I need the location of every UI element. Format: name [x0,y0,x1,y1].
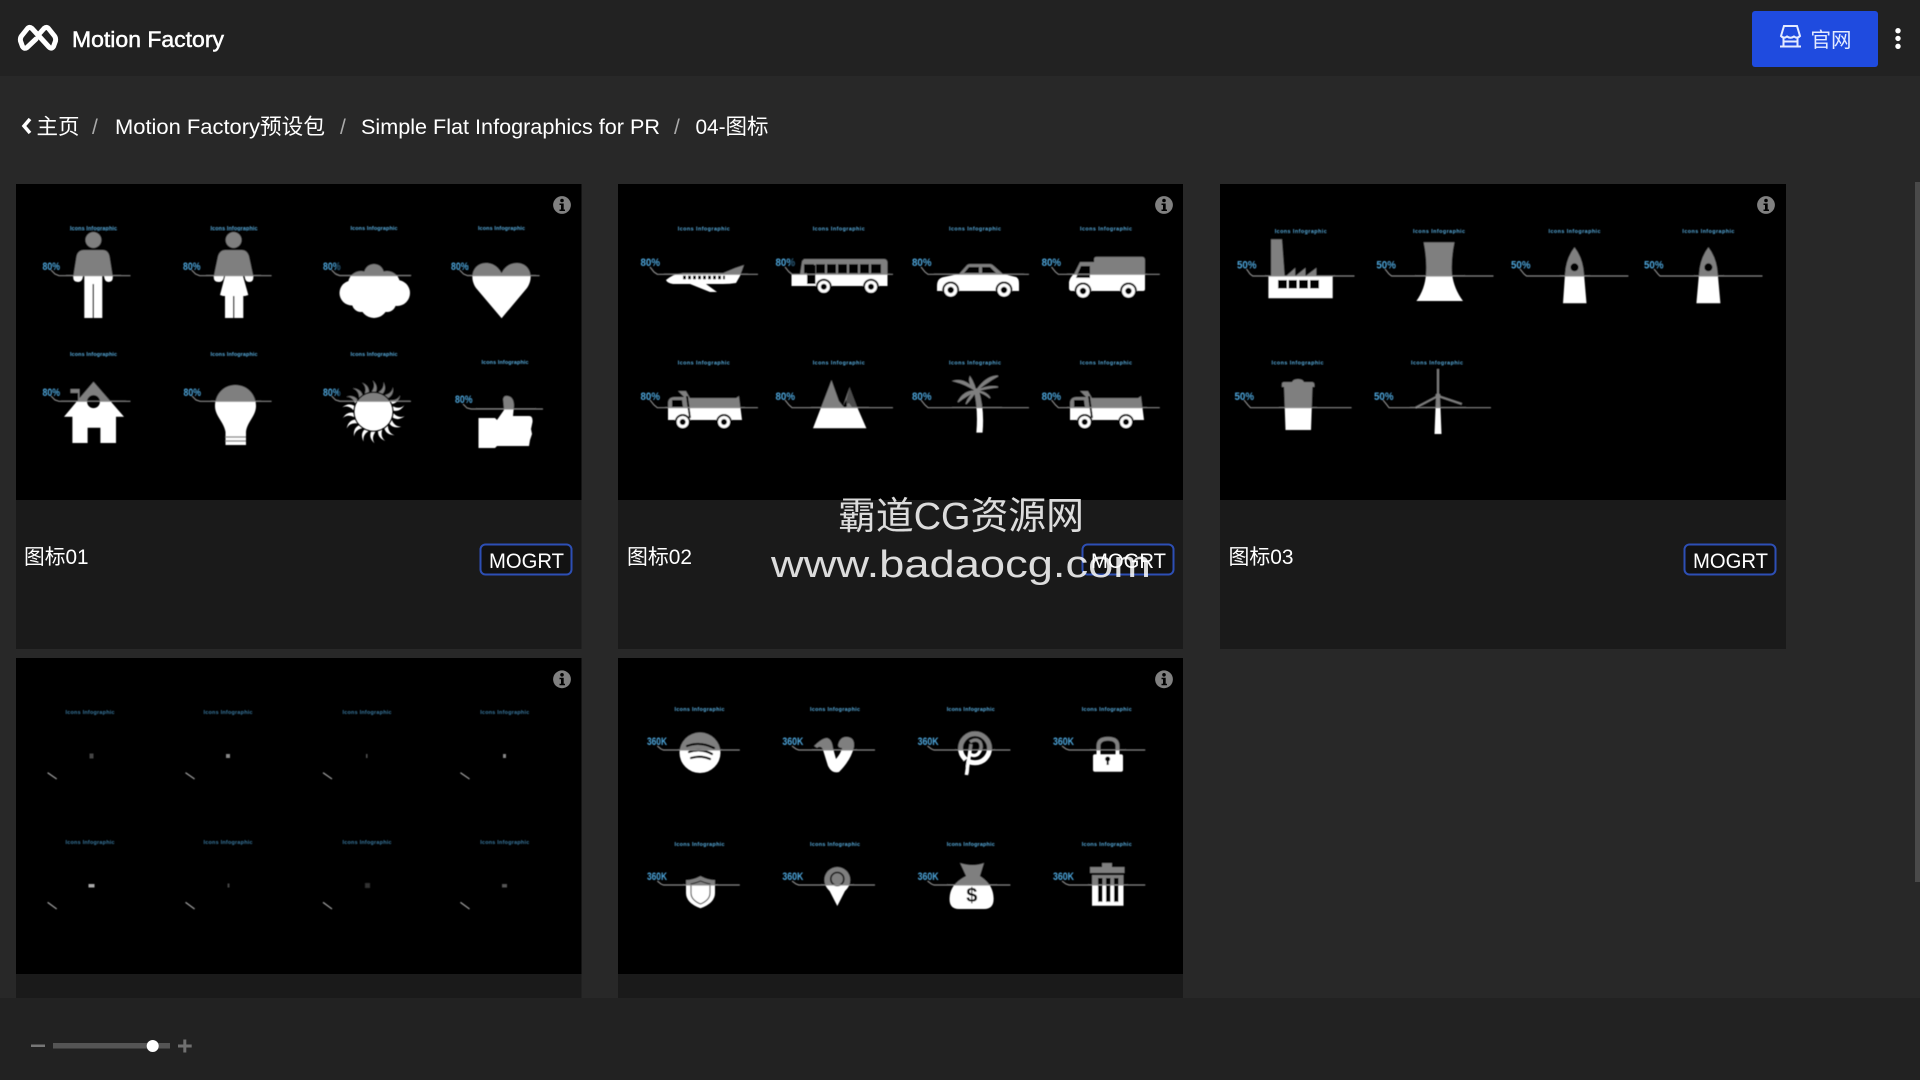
icon cell: rocket: Icons Infographic [1548,229,1600,235]
thumbnail: vehicles and landscape icons [618,184,1183,500]
icon cell: van [1042,226,1160,300]
icon cell: van: Icons Infographic [1080,226,1132,232]
card title: 图标03 [1228,546,1294,569]
icon: Motion Factory logo [20,28,56,48]
breadcrumb: Motion Factory [115,115,260,139]
row 1 of faint labels and marks: Icons Infographic [66,710,114,716]
icon cell: man [42,226,130,318]
icon cell: mountains [776,360,893,428]
icon cell: light bulb: Icons Infographic [210,352,258,358]
icon cell: man: 80% [42,261,60,273]
watermark [770,496,1151,586]
icon cell: cup [1234,360,1352,430]
thumbnail: brand and utility icons [618,658,1183,974]
icon cell: woman: Icons Infographic [210,226,258,232]
icon: storefront [1780,26,1801,46]
icon cell: cup: 50% [1234,391,1254,403]
icon cell: sun: Icons Infographic [350,352,398,358]
icon cell: cooling tower: 50% [1376,260,1396,272]
icon cell: vimeo: 360K [782,736,803,748]
icon cell: spotify: Icons Infographic [674,707,724,713]
icon cell: rocket: Icons Infographic [1682,229,1734,235]
button: MOGRT: MOGRT [489,550,564,573]
icon cell: shield [647,842,740,908]
breadcrumb: / [674,116,680,139]
icon cell: bus [776,226,893,295]
thumbnail: people and everyday icons [16,184,582,500]
icon cell: house [42,352,130,443]
icon cell: money bag: Icons Infographic [947,842,995,848]
button: MOGRT [480,544,572,574]
icon cell: rocket: 50% [1644,260,1664,272]
icon cell: trash can: 360K [1053,871,1074,883]
icon cell: pinterest: 360K [918,736,939,748]
icon: info badge [553,196,571,214]
breadcrumb: 主页 [36,115,80,139]
icon cell: palm tree: Icons Infographic [949,360,1001,366]
icon: info badge [1757,196,1775,214]
icon cell: dump truck: Icons Infographic [1080,360,1132,366]
icon cell: vimeo [782,707,875,772]
icon cell: cloud: Icons Infographic [350,226,398,232]
breadcrumb: 04- [696,115,726,139]
icon cell: bus: 80% [776,257,795,269]
row 1 of faint labels and marks [48,710,529,779]
card title: 图标01 [24,546,88,569]
row 1 of faint labels and marks: Icons Infographic [342,710,392,716]
icon cell: palm tree [912,360,1029,432]
icon cell: car: 80% [912,257,932,269]
icon cell: house: 80% [42,387,60,399]
breadcrumb: / [92,116,98,139]
row 2 of faint labels and marks: Icons Infographic [342,840,392,846]
button: MOGRT [1082,544,1174,574]
icon: zoom in plus [178,1040,192,1052]
icon cell: map pin: 360K [782,871,803,883]
button: MOGRT: MOGRT [1091,550,1166,573]
icon cell: woman [183,226,272,318]
icon cell: light bulb [184,352,272,445]
bottom zoom bar [0,998,1920,1080]
row 2 of faint labels and marks: Icons Infographic [480,840,529,846]
panel: card 图标02 [618,184,1183,649]
icon cell: airplane: 80% [640,257,660,269]
icon cell: padlock [1053,707,1145,772]
icon cell: mountains: Icons Infographic [813,360,865,366]
icon cell: heart: Icons Infographic [478,226,525,232]
icon cell: mountains: 80% [776,391,795,403]
icon cell: cup: Icons Infographic [1272,360,1324,366]
icon cell: thumbs up: 80% [455,394,473,406]
row 1 of faint labels and marks: Icons Infographic [204,710,252,716]
icon cell: rocket: 50% [1511,260,1531,272]
row 2 of faint labels and marks [48,840,529,909]
thumbnail: energy icons [1220,184,1786,500]
panel: card 图标01 [16,184,582,649]
icon cell: dump truck: 80% [640,391,660,403]
top navigation bar [0,0,1920,76]
icon cell: wind turbine [1374,360,1491,434]
icon cell: woman: 80% [183,261,201,273]
button: MOGRT [1684,544,1776,574]
card title: 图标02 [627,546,692,569]
breadcrumb: / [340,116,346,139]
brand name: Motion Factory [72,27,225,52]
icon cell: airplane: Icons Infographic [678,226,730,232]
icon cell: rocket [1644,229,1762,303]
icon: more menu dots [1895,28,1901,49]
icon cell: money bag: 360K [918,871,939,883]
icon cell: factory: 50% [1237,260,1257,272]
icon: info badge [1155,670,1173,688]
icon cell: dump truck: 80% [1042,391,1061,403]
breadcrumb: 图标 [726,115,768,139]
button: official site [1752,11,1878,67]
icon cell: trash can [1053,842,1145,906]
icon cell: pinterest: Icons Infographic [947,707,995,713]
icon cell: wind turbine: 50% [1374,391,1394,403]
icon cell: spotify: 360K [647,736,667,748]
breadcrumb [24,115,768,139]
icon cell: sun: 80% [323,387,341,399]
icon: info badge [1155,196,1173,214]
icon cell: bus: Icons Infographic [813,226,865,232]
button label: 官网 [1810,29,1852,52]
icon cell: thumbs up: Icons Infographic [482,360,528,366]
panel: card 图标03 [1220,184,1786,649]
icon: info badge [553,670,571,688]
icon cell: van: 80% [1042,257,1061,269]
icon cell: cloud [323,226,414,318]
row 1 of faint labels and marks: Icons Infographic [480,710,529,716]
icon cell: sun [323,352,411,443]
icon cell: car [912,226,1029,298]
icon cell: shield: 360K [647,871,667,883]
row 2 of faint labels and marks: Icons Infographic [66,840,114,846]
icon cell: heart [451,226,540,318]
breadcrumb: 预设包 [260,115,325,139]
panel: card 04 (dim frame) [16,658,582,1000]
icon cell: trash can: Icons Infographic [1082,842,1132,848]
icon cell: spotify [647,707,740,773]
thumbnail: start-of-animation frame [16,658,582,974]
icon: zoom out minus [31,1044,45,1047]
icon cell: factory: Icons Infographic [1275,229,1327,235]
icon cell: airplane [640,226,758,292]
icon cell: money bag [918,842,1010,909]
panel: card 05 (app icons) [618,658,1183,1000]
scrollbar [1915,182,1920,882]
icon cell: shield: Icons Infographic [674,842,724,848]
icon cell: thumbs up [455,360,543,448]
icon cell: cloud: 80% [323,261,341,273]
icon cell: heart: 80% [451,261,469,273]
watermark: 霸道CG资源网 [838,496,1084,538]
icon cell: dump truck: Icons Infographic [678,360,730,366]
icon cell: palm tree: 80% [912,391,932,403]
icon cell: rocket [1511,229,1628,303]
watermark: www.badaocg.com [770,544,1151,586]
icon cell: man: Icons Infographic [70,226,117,232]
icon cell: money bag: $ [966,885,977,907]
icon cell: factory [1237,229,1354,298]
zoom slider [53,1040,170,1052]
breadcrumb: Simple Flat Infographics for PR [361,115,660,139]
icon cell: light bulb: 80% [184,387,201,399]
icon cell: map pin [782,842,875,906]
icon cell: map pin: Icons Infographic [810,842,860,848]
icon cell: pinterest [918,707,1010,775]
icon cell: cooling tower: Icons Infographic [1413,229,1465,235]
icon cell: car: Icons Infographic [949,226,1001,232]
icon cell: wind turbine: Icons Infographic [1411,360,1463,366]
row 2 of faint labels and marks: Icons Infographic [204,840,252,846]
icon cell: dump truck [640,360,758,430]
icon cell: vimeo: Icons Infographic [810,707,860,713]
icon cell: cooling tower [1376,229,1494,301]
button: MOGRT: MOGRT [1693,550,1768,573]
icon cell: dump truck [1042,360,1160,430]
icon cell: padlock: Icons Infographic [1082,707,1132,713]
icon cell: padlock: 360K [1053,736,1074,748]
icon cell: house: Icons Infographic [70,352,117,358]
